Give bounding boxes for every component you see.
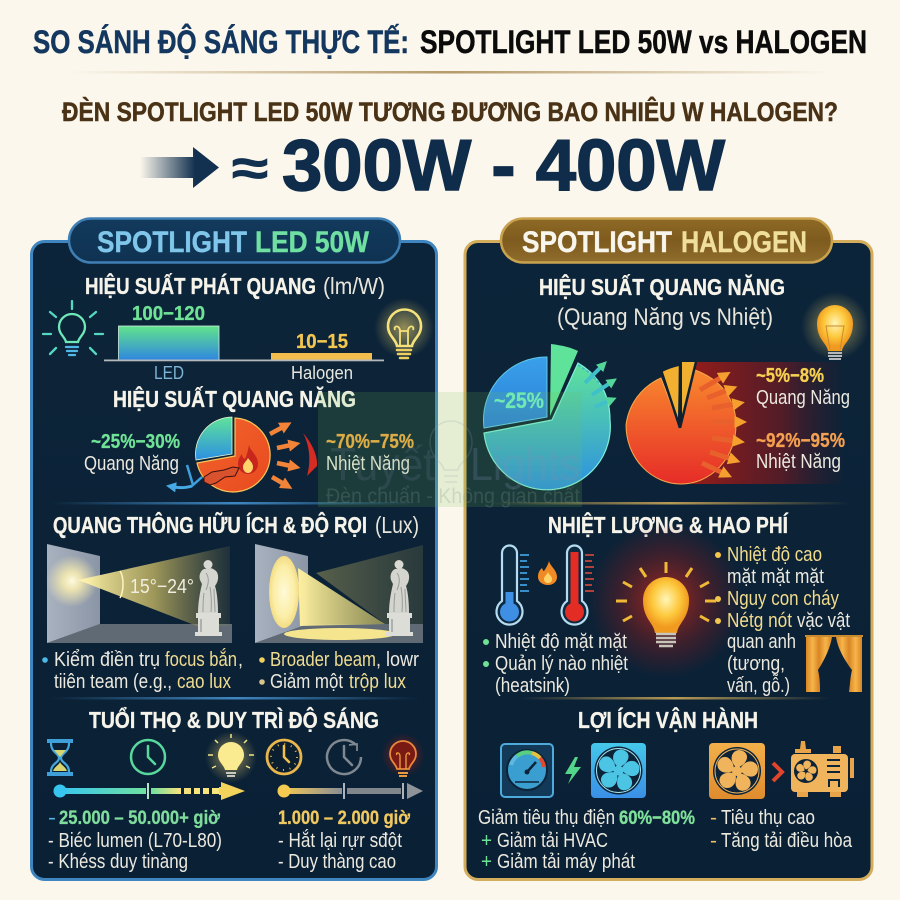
panel heading pill: HALOGEN — [681, 226, 807, 259]
beam angle label: 15°−24° — [130, 576, 194, 598]
bullets: LED beam — [42, 648, 243, 693]
heat arrow — [277, 445, 291, 448]
timeline: LED — [54, 782, 245, 800]
bullets: cool side: Quản lý nào nhiệt — [495, 653, 628, 675]
text: LED operating benefits: 60%−80% — [619, 807, 695, 829]
text: halogen operating costs: Tiêu thụ cao — [721, 807, 815, 829]
icon: lightning bolt — [565, 757, 581, 784]
pie chart: LED energy — [174, 417, 317, 492]
icon: flame — [538, 561, 557, 585]
bullets: halogen beam: Broader beam — [270, 649, 376, 671]
title — [33, 24, 867, 60]
label: heat share: ~70%−75% — [326, 431, 414, 453]
icon: dim red bulb — [381, 733, 425, 777]
icon: chevron — [773, 763, 782, 781]
statue — [386, 560, 413, 636]
heat arrow — [713, 420, 737, 424]
icon: flame — [238, 445, 258, 474]
icon: bright bulb — [205, 731, 257, 783]
icon: generator — [791, 741, 854, 797]
label: heat share — [326, 431, 414, 475]
heat arrow — [700, 377, 722, 390]
bullets: LED beam: Kiểm điền trụ — [54, 649, 160, 671]
label: halogen heat share: ~92%−95% — [756, 430, 845, 452]
separated slice — [550, 344, 578, 416]
label: Halogen: Halogen — [291, 363, 353, 383]
bullets: heat hazards: mặt mặt mặt — [727, 566, 824, 588]
text: LED lifespan: - — [48, 807, 56, 829]
label: halogen heat share — [756, 430, 845, 473]
icon: gold clock — [267, 740, 301, 774]
icon: gauge — [501, 744, 553, 797]
heading: useful flux and lux: (Lux) — [375, 512, 419, 538]
icon: hourglass — [47, 739, 73, 776]
icon: curtains — [805, 635, 863, 692]
pie chart: halogen energy — [626, 362, 737, 484]
bullets: cool side: Nhiệt độ mặt mặt — [495, 631, 627, 653]
icon: green clock — [131, 740, 165, 774]
heading: lifespan: TUỔI THỌ & DUY TRÌ ĐỘ SÁNG — [89, 706, 379, 733]
panel heading pill — [501, 218, 832, 262]
text: LED lifespan — [48, 807, 222, 873]
bullets: cool side: (heatsink) — [495, 675, 570, 697]
heat band behind pie — [692, 362, 842, 484]
panel heading pill: SPOTLIGHT — [522, 226, 672, 259]
bullets: LED beam: tiiên team (e.g., — [54, 671, 172, 693]
bullets: heat hazards — [715, 544, 850, 697]
label: LED: LED — [154, 363, 184, 383]
text: LED operating benefits: Giảm tiêu thụ điện — [478, 807, 615, 829]
text: halogen lifespan: - Hắt lại rựr sđột — [278, 829, 402, 852]
bullets: heat hazards: Nhiệt độ cao — [727, 544, 822, 566]
text: LED operating benefits: Giảm tải máy phát — [497, 851, 635, 873]
value range: 300W - 400W — [282, 126, 725, 206]
icon: arrow — [140, 147, 219, 188]
icon: LED bulb — [43, 301, 103, 355]
bullets: cool side — [483, 631, 628, 697]
value: ~25% — [494, 388, 544, 413]
bullets: halogen beam — [259, 649, 419, 693]
bullets: halogen beam: trộp lux — [349, 671, 406, 693]
cracked heatsink — [204, 467, 239, 485]
icon: overheating bulb — [588, 522, 744, 678]
bullets: heat hazards: Nguy con cháy — [727, 588, 839, 610]
text: LED operating benefits: + — [481, 851, 492, 873]
label: halogen light share: Quang Năng — [756, 387, 850, 409]
cool thermometer — [496, 546, 529, 625]
label: halogen light share: ~5%−8% — [756, 365, 824, 387]
hot thermometer — [562, 546, 594, 625]
bullets: LED beam: cao lux — [177, 671, 231, 693]
heat arrow — [270, 427, 283, 434]
text: halogen lifespan: - Duy thàng cao — [278, 851, 396, 873]
heat arrow — [710, 452, 731, 459]
blue loss arrows — [174, 486, 192, 488]
panel heading pill: SPOTLIGHT — [97, 226, 247, 259]
label: light share: ~25%−30% — [91, 431, 180, 453]
approx sign: ≈ — [232, 140, 268, 196]
heat arrow — [702, 463, 723, 473]
small light slices — [662, 366, 679, 418]
panel: spotlight LED 50W — [32, 218, 436, 880]
heat arrow — [707, 390, 728, 398]
label: halogen heat share: Nhiệt Năng — [756, 451, 841, 473]
heat arrow — [277, 463, 291, 466]
light ray arrow — [592, 383, 610, 395]
text: LED operating benefits: + — [481, 830, 492, 852]
label: light share: Quang Năng — [84, 453, 179, 475]
pie chart: LED comparison — [483, 344, 610, 490]
heat crescent — [303, 433, 317, 476]
watermark: Đèn chuẩn - Không gian chất — [326, 485, 580, 508]
text: halogen operating costs: - — [710, 830, 717, 852]
dashed ray arc — [578, 365, 603, 387]
heading: operating benefits: LỢI ÍCH VẬN HÀNH — [578, 706, 758, 733]
light share slice — [483, 357, 547, 428]
text: halogen lifespan: 1.000 – 2.000 giờ — [278, 807, 410, 829]
heat arrow — [712, 404, 735, 408]
panel heading pill: LED 50W — [255, 226, 370, 259]
label: light share — [84, 431, 180, 475]
scene: broad halogen beam — [255, 544, 423, 643]
bullets: halogen beam: Giảm một — [270, 671, 343, 693]
bullets: heat hazards: vặc vật — [797, 610, 850, 632]
panel heading pill — [69, 218, 400, 262]
heading: luminous efficacy: (lm/W) — [323, 273, 385, 299]
icon: blue fan — [591, 743, 646, 798]
heat arrow — [712, 438, 735, 441]
text: LED operating benefits — [478, 807, 695, 873]
bar: LED — [118, 326, 219, 360]
text: LED operating benefits: Giảm tải HVAC — [497, 830, 608, 852]
text: halogen operating costs — [710, 807, 853, 852]
bullets: heat hazards: Nétg nót — [727, 610, 792, 632]
bullets: halogen beam: , lowr — [376, 649, 419, 671]
scene: narrow LED beam — [46, 544, 232, 643]
text: LED lifespan: 25.000 – 50.000+ giờ — [59, 807, 220, 829]
text: LED lifespan: - Khéss duy tinàng — [48, 851, 188, 873]
bullets: LED beam: focus bắn — [165, 648, 237, 671]
bullets: heat hazards: (tương, — [727, 653, 785, 675]
text: halogen lifespan — [278, 807, 410, 873]
bullets: LED beam: , — [238, 649, 243, 671]
timeline: halogen — [278, 783, 423, 799]
heading: heat and waste: NHIỆT LƯỢNG & HAO PHÍ — [548, 511, 789, 538]
bullets: heat hazards: quan anh — [727, 631, 796, 653]
icon: halogen bulb — [374, 298, 434, 358]
watermark — [318, 392, 582, 508]
icon: glowing halogen bulb — [801, 292, 869, 360]
bar chart: efficacy — [104, 303, 384, 383]
panel background — [32, 242, 436, 880]
label: heat share: Nhiệt Năng — [326, 453, 410, 475]
text: halogen operating costs: Tăng tải điều hòa — [721, 830, 853, 852]
text: halogen operating costs: - — [710, 807, 717, 829]
heading: useful flux and lux: QUANG THÔNG HỮU ÍCH & ĐỘ RỌI — [53, 511, 367, 538]
heading: luminous efficacy: HIỆU SUẤT PHÁT QUANG — [85, 272, 316, 299]
heat arrow — [272, 477, 284, 484]
icon: gray clock — [327, 740, 361, 774]
value: Halogen: 10−15 — [296, 331, 348, 353]
statue — [195, 560, 222, 636]
icon: thermometers — [496, 546, 594, 625]
label: halogen light share — [756, 365, 850, 409]
value: LED: 100−120 — [132, 303, 205, 325]
heading: energy efficiency: HIỆU SUẤT QUANG NĂNG — [539, 273, 785, 300]
watermark: Tuyết — [330, 438, 435, 490]
watermark: Lights — [470, 438, 580, 490]
heading: energy efficiency: HIỆU SUẤT QUANG NĂNG — [113, 385, 356, 412]
light ray arrow — [585, 367, 601, 383]
title: SO SÁNH ĐỘ SÁNG THỰC TẾ: — [33, 24, 409, 60]
panel: spotlight halogen — [465, 218, 872, 880]
text: LED lifespan: - Biéc lumen (L70-L80) — [48, 830, 222, 852]
light ray arrow — [595, 401, 609, 407]
panel background — [465, 242, 872, 880]
icon: orange fan — [709, 743, 765, 799]
bullets: heat hazards: vấn, gỗ.) — [727, 674, 790, 697]
subheading: (Quang Năng vs Nhiệt) — [557, 304, 773, 331]
answer: arrow and value — [140, 126, 725, 206]
bar: Halogen — [271, 353, 372, 360]
